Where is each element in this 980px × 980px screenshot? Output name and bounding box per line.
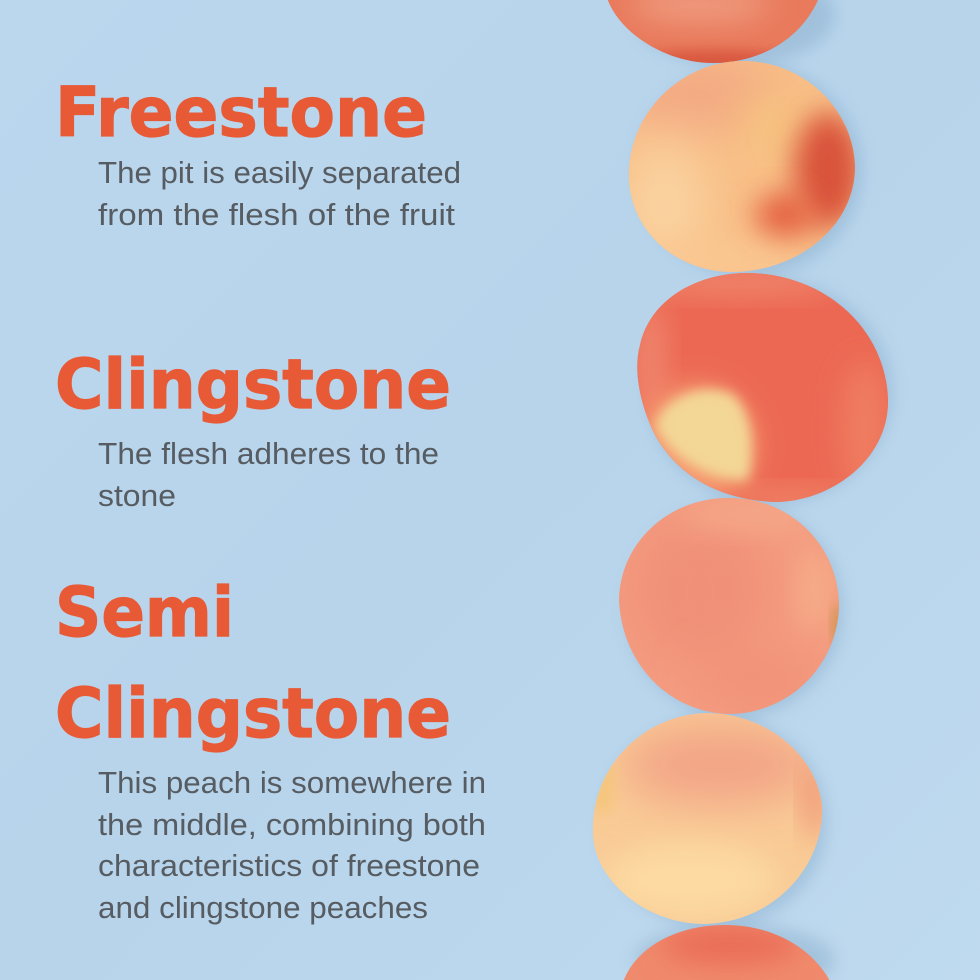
peach shadows — [603, 0, 892, 980]
peach 2 — [628, 61, 855, 272]
heading: Freestone: Freestone — [55, 73, 427, 153]
heading: Semi Clingstone: Clingstone — [55, 674, 451, 754]
text: Clingstone description: The flesh adheres to the — [98, 436, 439, 471]
peach 5 — [588, 708, 826, 928]
text: Semi Clingstone description: the middle, combining both — [98, 807, 486, 842]
peach 6 (bottom, cropped) — [624, 925, 830, 980]
peach 3 — [637, 273, 888, 502]
peach 4 — [615, 492, 843, 718]
text: Semi Clingstone description — [98, 765, 486, 925]
text: Semi Clingstone description: This peach is somewhere in — [98, 765, 486, 800]
heading: Semi Clingstone: Semi — [55, 573, 234, 653]
text: Clingstone description — [98, 436, 439, 513]
text: Freestone description: from the flesh of the fruit — [98, 197, 455, 232]
heading: Clingstone: Clingstone — [55, 345, 451, 425]
text: Semi Clingstone description: characteristics of freestone — [98, 848, 480, 883]
text: Freestone description — [98, 155, 461, 232]
text: Semi Clingstone description: and clingstone peaches — [98, 890, 428, 925]
heading: Semi Clingstone — [55, 573, 451, 754]
peach column — [588, 0, 895, 980]
peach 1 (top, cropped) — [608, 0, 818, 63]
text: Clingstone description: stone — [98, 478, 176, 513]
text: Freestone description: The pit is easily separated — [98, 155, 461, 190]
